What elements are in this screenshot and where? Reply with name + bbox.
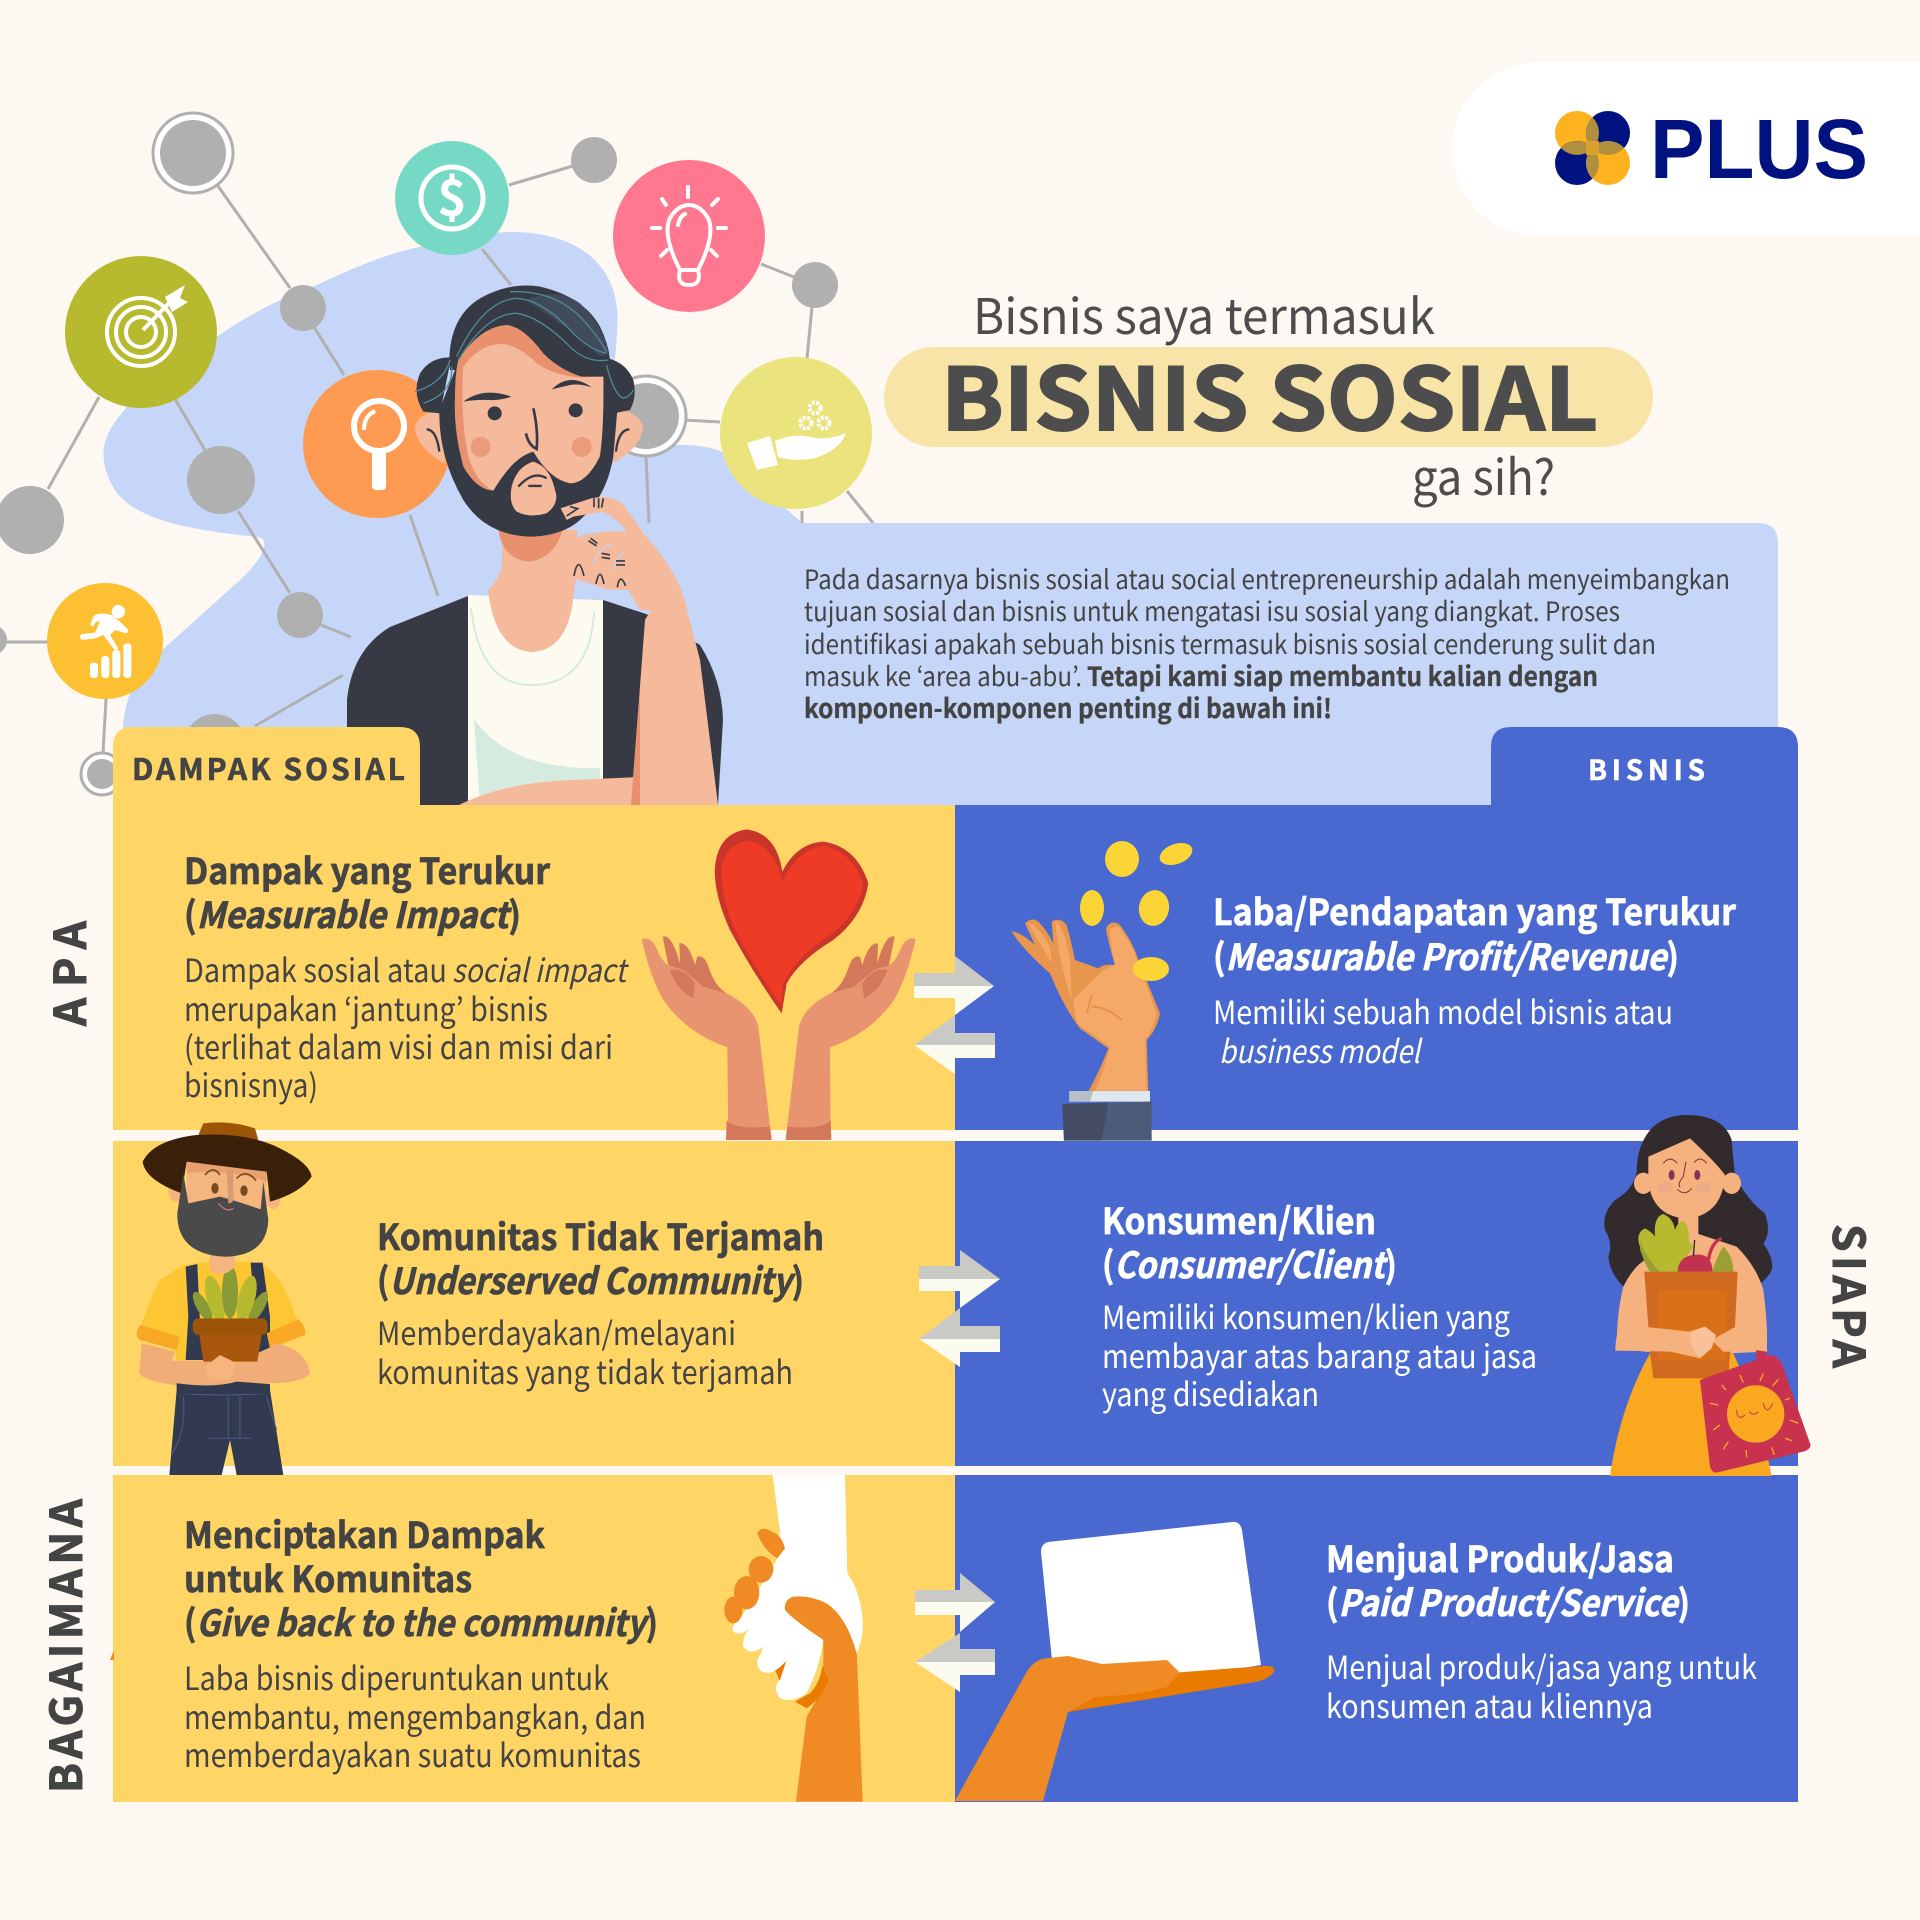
network lines (0, 166, 873, 753)
face (455, 325, 603, 491)
intro paragraph: tujuan sosial dan bisnis untuk mengatasi isu sosial yang diangkat. Proses (804, 590, 1620, 629)
neck (1678, 1210, 1698, 1242)
icon: magnifier (303, 370, 451, 518)
face (1634, 1173, 1653, 1194)
hair puffs (417, 357, 450, 413)
ears (415, 412, 445, 464)
intro paragraph: masuk ke ‘area abu-abu’. (804, 655, 1082, 694)
network nodes (0, 113, 838, 795)
text: give back to the community: Menciptakan Dampak (184, 1507, 545, 1559)
arrows: row one (914, 956, 995, 1074)
text: paid product: Menjual Produk/Jasa (1326, 1531, 1674, 1583)
text: measurable impact: (Measurable Impact) (184, 887, 521, 939)
beard silhouette (439, 370, 617, 537)
left hand (642, 936, 772, 1140)
text: measurable profit: Laba/Pendapatan yang Terukur (1213, 884, 1736, 936)
text: measurable impact (184, 843, 629, 1107)
text: give back to the community (184, 1507, 658, 1777)
icon: dollar coin (395, 141, 509, 255)
hair top (449, 286, 610, 378)
hat brim (143, 1134, 312, 1202)
icon: light bulb (613, 160, 765, 312)
text: give back to the community: Laba bisnis diperuntukan untuk (184, 1654, 609, 1700)
title highlight pill (884, 347, 1653, 447)
white hand (733, 1475, 863, 1700)
text: measurable profit (1213, 884, 1736, 1073)
hair (1604, 1115, 1772, 1287)
eyes (211, 1183, 219, 1194)
ears (168, 1178, 185, 1202)
title (884, 278, 1653, 510)
pear (1712, 1247, 1733, 1272)
character: thinking man (347, 286, 723, 805)
icon: dollar coin: $ (437, 159, 467, 231)
intro paragraph: komponen-komponen penting di bawah ini! (804, 687, 1332, 726)
brows (463, 393, 512, 402)
upper arm (631, 585, 718, 805)
text: measurable impact: social impact (452, 946, 629, 992)
sleeves (137, 1325, 179, 1350)
text: underserved community: Memberdayakan/melayani (377, 1309, 736, 1355)
illustration: hands holding heart (642, 829, 916, 1140)
forearms (1615, 1317, 1715, 1358)
text: paid product: (Paid Product/Service) (1326, 1575, 1690, 1627)
text: give back to the community: membantu, mengembangkan, dan (184, 1693, 646, 1739)
torso and arms (1617, 1233, 1767, 1358)
icon: hand with gears (720, 357, 872, 509)
icon: runner and bar chart (47, 583, 163, 699)
text: measurable profit: Memiliki sebuah model bisnis atau (1213, 988, 1673, 1034)
logo badge (1452, 62, 1920, 236)
apple (1678, 1255, 1713, 1272)
hat crown (198, 1122, 258, 1140)
shirt (468, 595, 603, 805)
shirt (140, 1262, 297, 1360)
text: consumer client (1102, 1193, 1537, 1416)
orange fingers (757, 1529, 785, 1558)
text: underserved community: Komunitas Tidak Terjamah (377, 1209, 824, 1261)
right hand (786, 936, 916, 1140)
text: give back to the community: (Give back to the community) (184, 1595, 658, 1647)
text: underserved community: (Underserved Community) (377, 1253, 804, 1305)
hand (205, 1355, 237, 1380)
text: measurable profit: (Measurable Profit/Revenue) (1213, 929, 1679, 981)
arrows: row three (915, 1573, 995, 1692)
panel: blue rows (955, 805, 1798, 1802)
intro paragraph (804, 558, 1730, 726)
text: consumer client: Konsumen/Klien (1102, 1193, 1376, 1245)
text: consumer client: (Consumer/Client) (1102, 1237, 1397, 1289)
chin (511, 462, 556, 515)
plants (1638, 1214, 1693, 1272)
heart (715, 829, 868, 1013)
text: paid product (1326, 1531, 1757, 1728)
arrows: row two (919, 1250, 1000, 1367)
shadow (795, 1665, 828, 1708)
neck (488, 530, 577, 652)
text: give back to the community: untuk Komunitas (184, 1551, 472, 1603)
text: underserved community: komunitas yang tidak terjamah (377, 1348, 793, 1394)
hand (560, 497, 687, 610)
tab: dampak sosial: DAMPAK SOSIAL (132, 745, 405, 789)
hand (1012, 920, 1160, 1092)
pants (169, 1390, 283, 1475)
illustration: hand holding card (955, 1522, 1274, 1801)
logo mark (1555, 111, 1630, 185)
sleeve (1062, 1102, 1152, 1141)
text: paid product: konsumen atau kliennya (1326, 1682, 1653, 1728)
title: Bisnis saya termasuk (973, 278, 1435, 349)
tab: dampak sosial (113, 727, 420, 805)
forearm (459, 777, 640, 805)
cheeks (471, 437, 491, 457)
nose (526, 408, 537, 449)
text: measurable impact: (terlihat dalam visi dan misi dari (184, 1023, 613, 1069)
neck shadow (498, 527, 563, 562)
dress (1610, 1353, 1772, 1476)
illustration: helping hands (724, 1475, 863, 1802)
text: underserved community (377, 1209, 824, 1394)
small orange tick (110, 1650, 114, 1660)
hair strands (415, 292, 633, 403)
title: ga sih? (1412, 439, 1555, 510)
cuff (1069, 1091, 1150, 1102)
tote bag (1756, 1350, 1767, 1362)
tab: bisnis (1491, 727, 1798, 805)
light blue intro panel (802, 523, 1778, 805)
icon: target (65, 256, 217, 408)
beard (177, 1173, 268, 1257)
text: consumer client: Memiliki konsumen/klien yang (1102, 1293, 1510, 1339)
arms (139, 1343, 310, 1386)
text: give back to the community: memberdayakan suatu komunitas (184, 1731, 641, 1777)
background blob (103, 232, 802, 805)
panel: yellow rows (113, 805, 955, 1802)
logo wordmark: PLUS (1650, 102, 1868, 196)
overall straps (186, 1264, 200, 1360)
text: paid product: Menjual produk/jasa yang untuk (1326, 1643, 1757, 1689)
eyes (488, 406, 502, 420)
pot (199, 1335, 262, 1362)
text: measurable impact: bisnisnya) (184, 1061, 318, 1107)
text: consumer client: yang disediakan (1102, 1370, 1319, 1416)
side label: apa: APA (35, 920, 99, 1027)
side label: siapa: SIAPA (1820, 1224, 1884, 1369)
illustration: woman with groceries (1604, 1115, 1811, 1476)
orange arm (785, 1596, 863, 1802)
intro paragraph: Pada dasarnya bisnis sosial atau social entrepreneurship adalah menyeimbangkan (804, 558, 1730, 597)
head (415, 286, 687, 610)
text: consumer client: membayar atas barang atau jasa (1102, 1332, 1537, 1378)
nose (227, 1170, 234, 1203)
face (187, 1162, 267, 1210)
text: measurable profit: business model (1219, 1027, 1423, 1073)
jacket (347, 596, 723, 805)
neck (210, 1253, 235, 1274)
grocery bag (1644, 1272, 1738, 1378)
side label: bagaimana: BAGAIMANA (31, 1498, 95, 1793)
intro paragraph: Tetapi kami siap membantu kalian dengan (1087, 655, 1598, 694)
plant (189, 1289, 216, 1324)
text: measurable impact: Dampak sosial atau (184, 946, 447, 992)
illustration: farmer (137, 1122, 312, 1475)
title: BISNIS SOSIAL (941, 330, 1598, 455)
tab: bisnis: BISNIS (1588, 749, 1705, 789)
text: measurable impact: Dampak yang Terukur (184, 843, 550, 895)
text: measurable impact: merupakan ‘jantung’ bisnis (184, 985, 548, 1031)
illustration: hand with coins (1012, 839, 1195, 1141)
intro paragraph: identifikasi apakah sebuah bisnis termasuk bisnis sosial cenderung sulit dan (804, 623, 1656, 662)
